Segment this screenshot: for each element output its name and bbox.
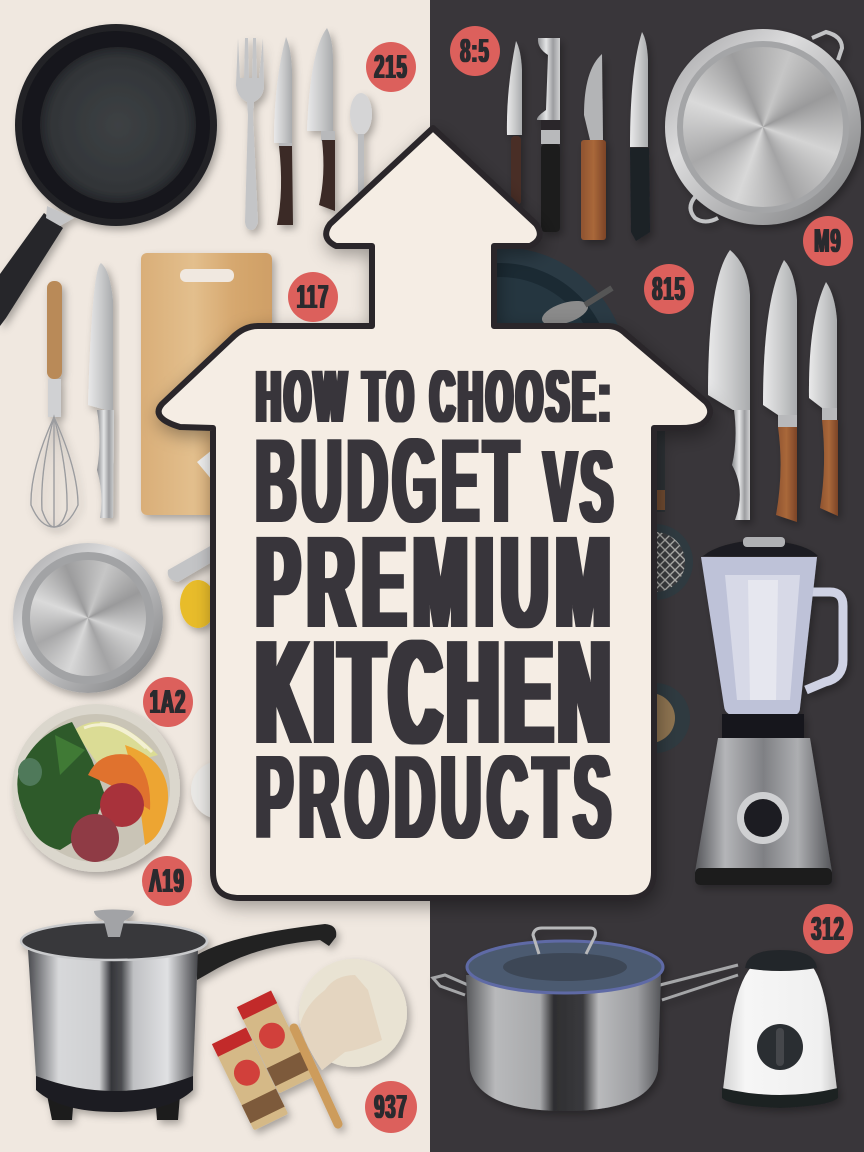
rare tomato (100, 783, 144, 827)
badge: 117: 117 (297, 278, 329, 315)
wood handled knife (584, 54, 603, 140)
icon: partial items behind panel (168, 545, 249, 819)
background: budget side (0, 0, 430, 1152)
paring knife (507, 41, 522, 135)
badge: M9: M9 (814, 222, 842, 259)
title (256, 356, 618, 864)
icon: black frying pan (0, 24, 217, 326)
badge: A19 (142, 856, 192, 906)
icon: premium knife row (507, 32, 650, 241)
icon: cutlery set (236, 28, 372, 230)
icon: steel pan with handles (665, 29, 861, 225)
title vs: VS (544, 430, 617, 545)
icon: salad plate (12, 704, 180, 872)
cucumber and lemon slices (74, 722, 158, 770)
title line 5: PRODUCTS (256, 730, 617, 864)
icon: spice jars and plate (212, 959, 407, 1130)
title line 1: HOW TO CHOOSE: (256, 356, 614, 439)
badge: 8:5: 8:5 (460, 32, 490, 69)
greens (17, 722, 105, 850)
title line 2: BUDGET (256, 413, 523, 548)
badge: M9 (803, 216, 853, 266)
icon: utility knife (88, 263, 114, 518)
badge: 117 (288, 272, 338, 322)
badge: 815: 815 (652, 270, 686, 307)
icon: premium glass lid pot (433, 928, 738, 1111)
title line 4: KITCHEN (256, 609, 616, 775)
oranges (125, 745, 168, 845)
small knife (274, 37, 292, 143)
icon: small white blender (722, 950, 838, 1108)
icon: partial dark cookware behind panel (617, 428, 693, 753)
badge: 1A2: 1A2 (150, 683, 186, 720)
title line 3: PREMIUM (256, 508, 618, 655)
icon: steel pot with lid (21, 910, 336, 1120)
badge: 312 (803, 904, 853, 954)
fork (236, 38, 264, 230)
meat (71, 814, 119, 862)
icon: wooden cutting board (141, 253, 272, 515)
icon: premium blender (695, 537, 843, 885)
badge: 937 (365, 1081, 417, 1133)
boning knife with steel bolster (537, 38, 560, 120)
icon: dark pan behind panel window (372, 247, 628, 503)
icon: steel skillet (13, 543, 163, 693)
background: premium side (430, 0, 864, 1152)
badge: 1A2 (143, 677, 193, 727)
tomato slice (88, 754, 150, 810)
black handled knife (630, 32, 648, 147)
panel: house-and-arrow title shape (159, 128, 710, 898)
chef knife (307, 28, 333, 131)
badge: 8:5 (450, 26, 500, 76)
spoon (350, 93, 372, 135)
icon: three chef knives (708, 250, 838, 522)
badge: A19: Λ19 (149, 862, 185, 899)
badge: 815 (644, 264, 694, 314)
badge: 215 (366, 42, 416, 92)
badge: 215: 215 (374, 48, 408, 85)
badge: 312: 312 (811, 910, 845, 947)
icon: whisk (31, 281, 78, 527)
badge: 937: 937 (374, 1088, 408, 1125)
